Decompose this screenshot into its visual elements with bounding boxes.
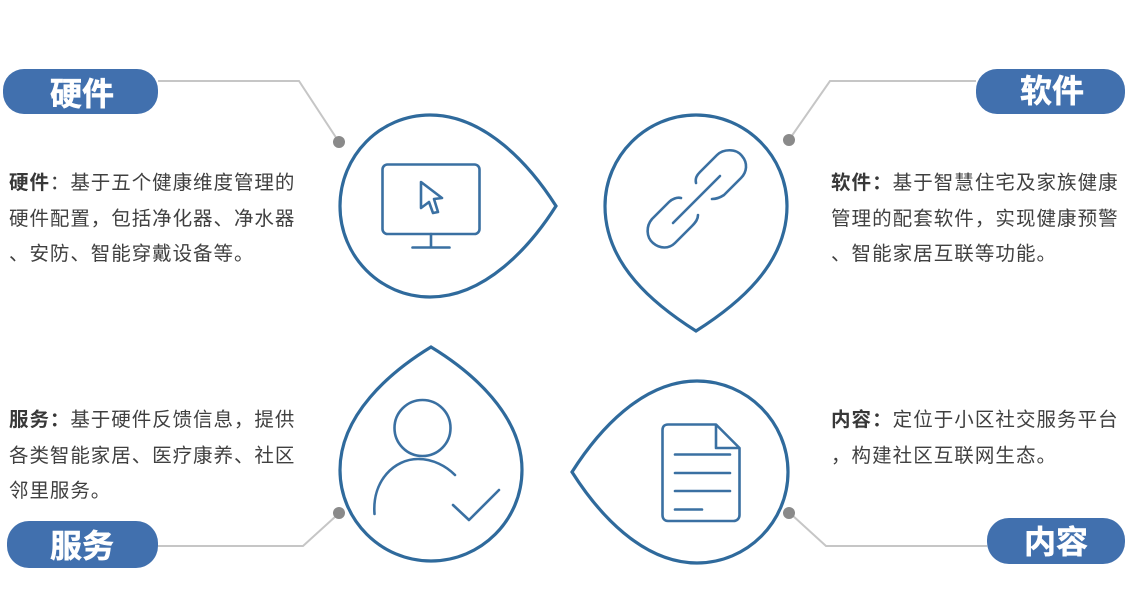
drop: content: [572, 381, 788, 563]
panel: content: [572, 381, 1125, 564]
panel: hardware: [3, 69, 556, 297]
text block: service description: 邻里服务。: [9, 480, 111, 502]
badge: software: [976, 69, 1125, 114]
icon: document: [662, 424, 740, 521]
text block: hardware description: 、安防、智能穿戴设备等。: [9, 243, 254, 265]
badge: software: 软件: [1020, 73, 1084, 109]
badge: service: 服务: [50, 528, 114, 564]
icon: monitor with cursor: [382, 164, 480, 248]
badge: hardware: 硬件: [50, 76, 114, 112]
text block: content description: [831, 408, 1119, 467]
text block: hardware description: 硬件配置，包括净化器、净水器: [9, 208, 295, 230]
text block: content description: 内容：定位于小区社交服务平台: [831, 408, 1119, 431]
badge: hardware: [3, 69, 158, 114]
icon: person with check: [374, 400, 499, 520]
text block: service description: 服务：基于硬件反馈信息，提供: [9, 409, 295, 431]
text block: service description: [9, 409, 295, 502]
icon: chain link: [648, 150, 746, 248]
badge: content: 内容: [1024, 524, 1088, 560]
drop: software: [605, 115, 787, 331]
drop: hardware: [340, 115, 556, 297]
text block: software description: 管理的配套软件，实现健康预警: [831, 208, 1119, 230]
text block: hardware description: [9, 172, 295, 265]
text block: content description: ，构建社区互联网生态。: [831, 445, 1057, 467]
connector: software: [783, 81, 976, 146]
text block: software description: [831, 172, 1119, 265]
text block: hardware description: 硬件：基于五个健康维度管理的: [9, 172, 295, 194]
badge: service: [7, 521, 158, 568]
text block: software description: 、智能家居互联等功能。: [831, 243, 1057, 265]
text block: service description: 各类智能家居、医疗康养、社区: [9, 445, 295, 467]
badge: content: [987, 518, 1125, 564]
connector: service: [158, 507, 345, 546]
text block: software description: 软件：基于智慧住宅及家族健康: [831, 172, 1119, 194]
connector: content: [783, 507, 987, 546]
panel: service: [7, 347, 522, 568]
connector: hardware: [158, 81, 345, 148]
drop: service: [340, 347, 522, 561]
panel: software: [605, 69, 1125, 331]
